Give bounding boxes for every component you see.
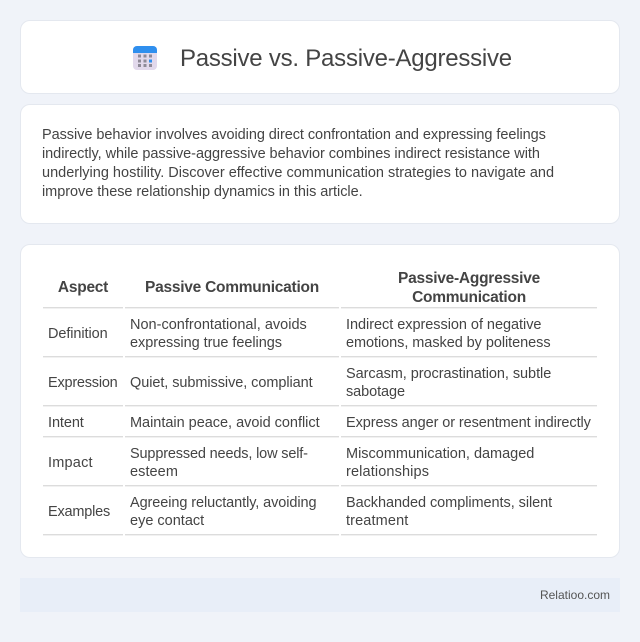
row: definition: Indirect expression of negative (346, 317, 541, 333)
intro text: improve these relationship dynamics in this article. (42, 184, 363, 200)
row: impact: Miscommunication, damaged (346, 446, 534, 462)
intro text (42, 127, 554, 200)
row: definition: expressing true feelings (130, 335, 282, 351)
table header row (58, 270, 540, 306)
row: impact: Impact (48, 455, 93, 471)
row: impact: esteem (130, 464, 178, 480)
row: examples: eye contact (130, 513, 204, 529)
footer bar (20, 578, 620, 612)
intro text: indirectly, while passive-aggressive behavior combines indirect resistance with (42, 146, 540, 162)
row: definition (48, 317, 551, 351)
intro text: underlying hostility. Discover effective communication strategies to navigate and (42, 165, 554, 181)
row: examples (48, 495, 552, 529)
row: impact (48, 446, 534, 480)
title: Passive vs. Passive-Aggressive (180, 45, 512, 72)
panel: title header (20, 20, 620, 94)
panel: comparison table (20, 244, 620, 558)
intro text: Passive behavior involves avoiding direct confrontation and expressing feelings (42, 127, 546, 143)
row: expression: Expression (48, 375, 118, 391)
row: expression (48, 366, 551, 400)
table header row: Passive-Aggressive (398, 270, 540, 287)
row: impact: relationships (346, 464, 429, 480)
row: intent (48, 415, 591, 431)
row: examples: treatment (346, 513, 408, 529)
footer credit: Relatioo.com (540, 588, 610, 602)
row: intent: Express anger or resentment indirectly (346, 415, 591, 431)
row: impact: Suppressed needs, low self- (130, 446, 308, 462)
table header row: Aspect (58, 279, 108, 296)
row: definition: emotions, masked by politeness (346, 335, 551, 351)
row: examples: Agreeing reluctantly, avoiding (130, 495, 316, 511)
row: expression: Quiet, submissive, compliant (130, 375, 313, 391)
table header row: Communication (412, 289, 526, 306)
row: expression: Sarcasm, procrastination, subtle (346, 366, 551, 382)
table header row: Passive Communication (145, 279, 319, 296)
row: examples: Examples (48, 504, 110, 520)
row: definition: Non-confrontational, avoids (130, 317, 307, 333)
row: expression: sabotage (346, 384, 405, 400)
row: intent: Maintain peace, avoid conflict (130, 415, 320, 431)
icon: calendar (133, 46, 157, 70)
row: examples: Backhanded compliments, silent (346, 495, 552, 511)
row: definition: Definition (48, 326, 108, 342)
row: intent: Intent (48, 415, 84, 431)
panel: introduction (20, 104, 620, 224)
